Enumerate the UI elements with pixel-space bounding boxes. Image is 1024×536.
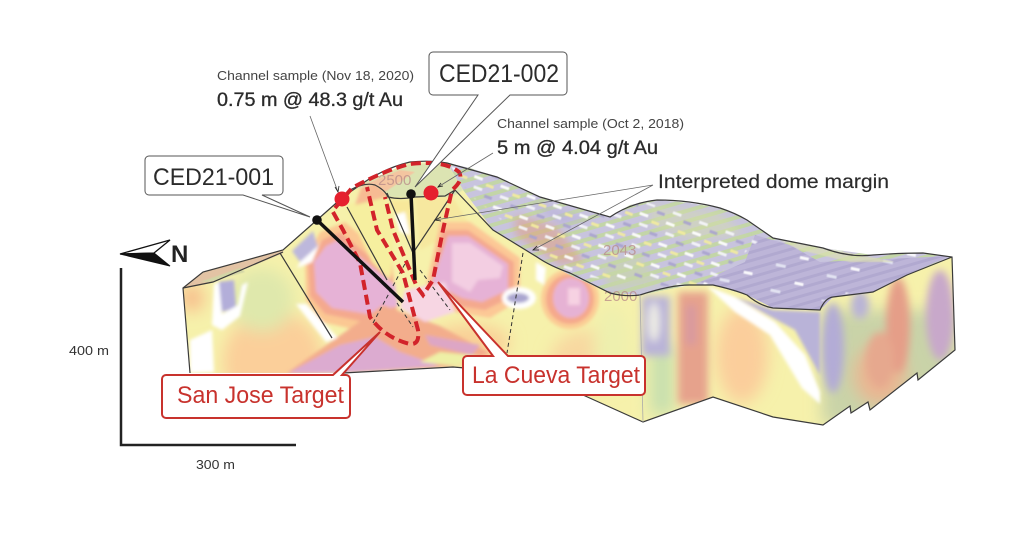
callout: CED21-002: CED21-002 [439, 60, 559, 88]
scale bars: 400 m [69, 343, 109, 358]
leader lines and arrows [310, 116, 653, 250]
model outline [183, 161, 955, 425]
callout: San Jose Target: San Jose Target [177, 382, 344, 409]
icon: north arrow [120, 240, 188, 268]
text: interpreted dome margin: Interpreted dome margin [658, 171, 889, 193]
faint grid numbers on the surface [378, 172, 637, 305]
text: channel sample Oct 2018: Channel sample (Oct 2, 2018) [497, 116, 684, 131]
small pink blob [541, 269, 599, 329]
text: channel sample Oct 2018 [497, 116, 684, 159]
panel: block model front faces [184, 162, 954, 424]
callout: CED21-001: CED21-001 [153, 164, 274, 191]
faint grid numbers on the surface: 2500 [378, 172, 411, 189]
icon: north arrow: N [171, 241, 188, 268]
faint grid numbers on the surface: 2043 [603, 242, 636, 259]
right white stripe with lavender band [735, 297, 820, 375]
San Jose target dashed outline [333, 187, 418, 344]
blocky colour zones [305, 222, 398, 332]
panel: top surface of model [448, 164, 950, 310]
callout: La Cueva Target: La Cueva Target [472, 362, 640, 389]
drill hole CED21-001 [312, 215, 403, 302]
scale bars [69, 268, 296, 472]
lower folded surface [287, 305, 490, 373]
left strip of top surface [183, 163, 463, 288]
scale bars: 300 m [196, 457, 235, 472]
faint grid numbers on the surface: 2000 [604, 288, 637, 305]
callout: CED21-002 [415, 52, 567, 187]
text: channel sample Oct 2018: 5 m @ 4.04 g/t Au [497, 138, 658, 159]
infographic: geological block model [69, 52, 956, 469]
interior dashed faults [373, 253, 523, 353]
dome colours [345, 196, 395, 280]
thin grey edge at model corner [640, 295, 643, 422]
callout: CED21-001 [145, 156, 310, 217]
callout: San Jose Target [162, 332, 380, 418]
red dot: channel sample 2020 [334, 192, 350, 206]
text: channel sample Nov 2020: 0.75 m @ 48.3 g/t Au [217, 90, 403, 111]
La Cueva target dashed outline [335, 163, 460, 295]
red dot: channel sample 2018 [424, 186, 438, 200]
La Cueva pink zone [425, 222, 520, 318]
text: channel sample Nov 2020: Channel sample (Nov 18, 2020) [217, 68, 414, 83]
drill hole CED21-002 [406, 189, 416, 280]
callout: La Cueva Target [438, 282, 645, 395]
text: channel sample Nov 2020 [217, 68, 414, 111]
